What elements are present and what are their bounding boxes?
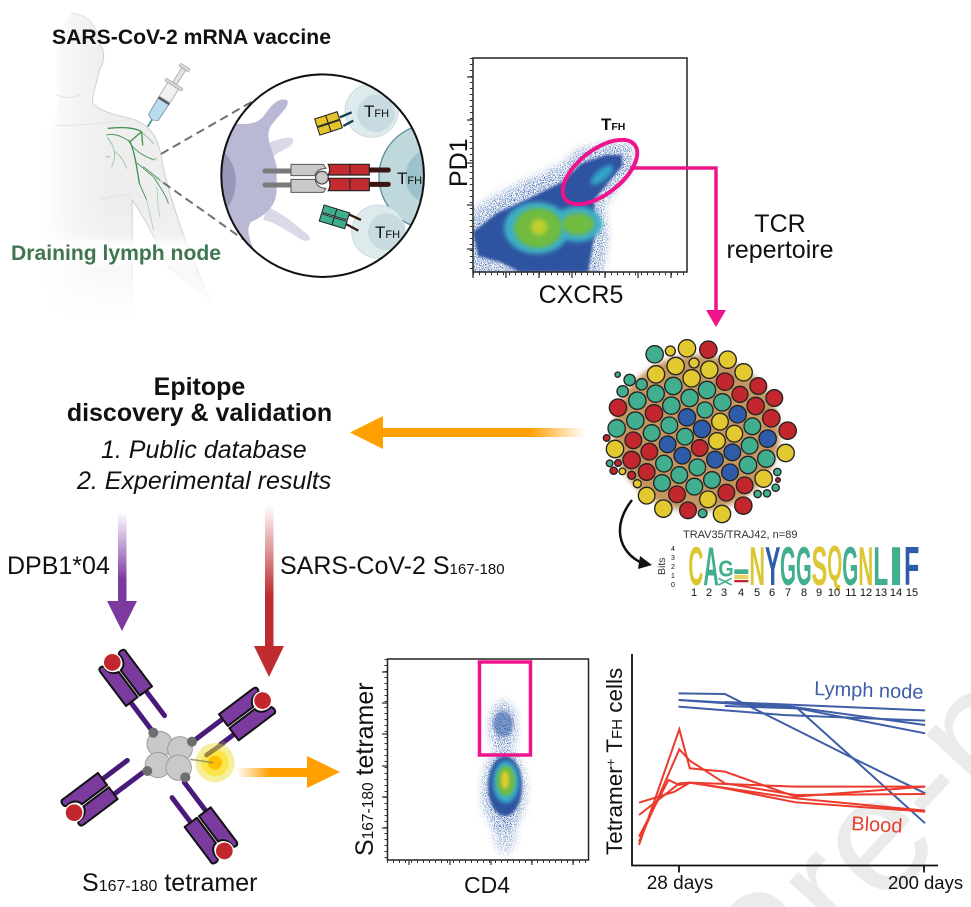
logo position numbers — [691, 587, 918, 599]
axes — [632, 654, 938, 872]
label: SARS-CoV-2 S167-180: SARS-CoV-2 S167-180 — [280, 552, 505, 580]
logo position numbers: 7 — [785, 587, 791, 599]
logo letters: Y — [765, 535, 780, 597]
logo letters: G — [796, 535, 812, 597]
logo letters: N — [749, 535, 765, 597]
label: DPB1*04: DPB1*04 — [7, 552, 110, 580]
label: TCR repertoire — [726, 210, 834, 264]
logo letters: S — [812, 535, 827, 597]
human silhouette — [56, 13, 210, 298]
scatter clouds — [482, 701, 526, 854]
logo position numbers: 14 — [890, 587, 902, 599]
yellow receptor — [315, 112, 353, 135]
green receptor — [319, 205, 361, 231]
logo position numbers: 9 — [816, 587, 822, 599]
illustration: body with injection and lymph vessels — [56, 13, 258, 298]
logo position numbers: 3 — [721, 587, 727, 599]
logo letters: A — [703, 535, 719, 597]
flow plot: PD1 vs CXCR5 — [445, 58, 687, 309]
logo letters: I — [888, 535, 904, 597]
series: lymph node — [679, 693, 925, 823]
gate label: TFH — [601, 115, 625, 134]
label: TCR repertoire: TCR — [754, 210, 806, 238]
density cloud — [466, 143, 634, 280]
logo y ticks: 1 — [671, 573, 675, 580]
x tick labels: 28 days — [647, 873, 713, 894]
label: draining lymph node: Draining lymph node — [11, 241, 221, 265]
TFH top — [345, 84, 398, 137]
logo y ticks: 3 — [671, 555, 675, 562]
gate: TFH ellipse — [552, 128, 648, 216]
line chart: tetramer+ TFH cells over time: 200 days — [888, 872, 963, 893]
y label: S167-180 tetramer — [351, 682, 379, 856]
heading: epitope discovery and validation — [67, 373, 332, 427]
axis ticks — [467, 58, 687, 278]
logo letters: G — [718, 556, 734, 582]
logo position numbers: 8 — [801, 587, 807, 599]
plot box — [388, 659, 588, 860]
streptavidin core — [145, 731, 192, 780]
x axis label: CXCR5 — [539, 281, 623, 309]
logo y ticks: 0 — [671, 582, 675, 589]
TFH right — [378, 128, 420, 226]
arrow: repertoire to epitope discovery — [350, 416, 585, 449]
arrow: tetramer to flow plot — [236, 756, 340, 788]
logo y ticks — [671, 546, 675, 589]
y axis label: Tetramer — [602, 766, 627, 855]
syringe — [139, 61, 194, 132]
logo position numbers: 12 — [860, 587, 872, 599]
labels: TFH in inset: TFH — [375, 223, 400, 242]
arrow: TFH gate to repertoire — [630, 168, 726, 327]
text: F — [904, 535, 919, 597]
heading: epitope discovery and validation: discovery & validation — [67, 399, 332, 427]
x label: CD4 — [464, 872, 510, 898]
y axis label: T — [602, 739, 627, 759]
logo letters: Q — [827, 536, 842, 592]
zoom dashes — [161, 99, 257, 239]
logo position numbers: 10 — [828, 587, 840, 599]
line chart: tetramer+ TFH cells over time — [602, 654, 963, 894]
arms — [56, 645, 280, 869]
series: blood — [639, 729, 925, 845]
title: SARS-CoV-2 mRNA vaccine: SARS-CoV-2 mRNA vaccine — [52, 25, 331, 49]
y axis label: FH cells — [602, 668, 627, 739]
logo position numbers: 2 — [706, 587, 712, 599]
labels: TFH in inset — [364, 102, 422, 242]
labels: TFH in inset: TFH — [397, 169, 422, 188]
logo title: TRAV35/TRAJ42, n=89 — [683, 529, 797, 541]
sequence logo — [656, 529, 919, 599]
lymph vessels — [106, 128, 168, 230]
gate rectangle — [480, 662, 530, 755]
arrow: SARS-CoV-2 S167-180 — [254, 505, 284, 677]
heading: epitope discovery and validation: Epitope — [154, 373, 245, 401]
y axis label: PD1 — [445, 138, 473, 187]
y axis label: + — [603, 759, 618, 766]
series label: lymph node: Lymph node — [814, 678, 924, 704]
logo letters: G — [842, 535, 858, 597]
network: TCR repertoire clusters — [603, 340, 796, 523]
logo y axis: Bits — [656, 557, 668, 575]
logo position numbers: 11 — [845, 587, 857, 599]
logo position numbers: 6 — [769, 587, 775, 599]
tetramer illustration — [56, 645, 280, 869]
label: TCR repertoire: repertoire — [726, 236, 834, 264]
logo letters: N — [858, 535, 873, 597]
logo position numbers: 15 — [906, 587, 918, 599]
labels: TFH in inset: TFH — [364, 102, 389, 121]
logo letters: G — [780, 535, 796, 597]
logo position numbers: 1 — [691, 587, 697, 599]
logo position numbers: 4 — [738, 587, 744, 599]
inset circle: APC and TFH cells — [220, 73, 425, 278]
logo position numbers: 13 — [875, 587, 887, 599]
label: S167-180 tetramer: S167-180 tetramer — [82, 869, 257, 897]
logo letters — [688, 535, 919, 597]
MHC and red TCR — [265, 164, 388, 192]
white band behind label — [7, 240, 213, 265]
series label: blood: Blood — [851, 813, 903, 838]
logo position numbers: 5 — [754, 587, 760, 599]
flow plot: tetramer vs CD4 — [351, 659, 589, 898]
ticks — [382, 659, 589, 865]
axes box — [473, 58, 687, 272]
list: discovery methods: 2. Experimental results — [76, 467, 331, 495]
biotin dots — [142, 728, 197, 782]
dendritic cell — [222, 99, 310, 248]
list: discovery methods — [76, 436, 331, 495]
TFH bottom — [352, 205, 405, 258]
logo y ticks: 4 — [671, 546, 675, 553]
curved arrow: network to logo — [620, 500, 652, 569]
logo letters: C — [688, 535, 703, 597]
arrow: DPB1*04 — [107, 512, 137, 631]
logo y ticks: 2 — [671, 564, 675, 571]
logo letters: L — [873, 535, 888, 597]
fluorophore — [190, 743, 235, 782]
list: discovery methods: 1. Public database — [101, 436, 307, 464]
